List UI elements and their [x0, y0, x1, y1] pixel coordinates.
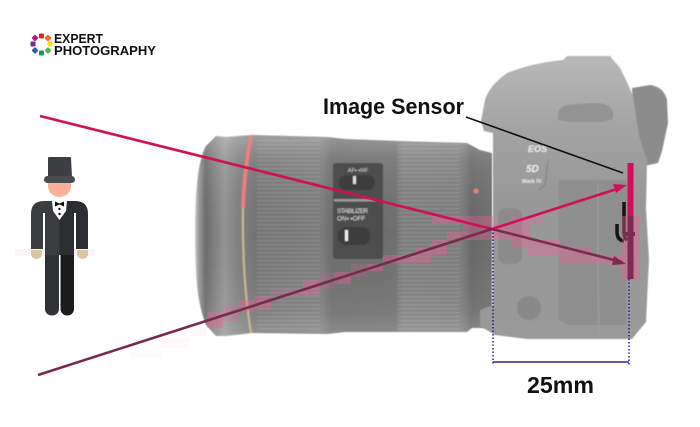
lens red ring [243, 136, 251, 208]
icon: colour ring [30, 34, 52, 56]
switch panel: ON▪ ▪OFF [337, 216, 365, 222]
switch panel: STABILIZER [337, 208, 368, 215]
legs [45, 255, 59, 316]
top dial [558, 103, 613, 122]
pointer line to sensor [466, 117, 623, 173]
camera markings: 5D [526, 164, 539, 175]
shirt and bow tie [52, 201, 67, 220]
ray: top of subject to bottom of sensor [40, 116, 626, 265]
ray: bottom of subject to top of sensor [38, 184, 627, 375]
eyepiece [632, 85, 668, 166]
image sensor label: Image Sensor [323, 94, 464, 119]
switch panel [333, 163, 383, 259]
logo text: PHOTOGRAPHY [54, 43, 156, 58]
image sensor bar [624, 163, 635, 279]
logo [30, 31, 156, 58]
camera markings: EOS [528, 144, 547, 154]
logo text: EXPERT [54, 31, 103, 46]
hat [48, 157, 72, 177]
figure: man in top hat [31, 157, 88, 316]
hands [31, 250, 42, 259]
pink pixel highlights [130, 216, 640, 358]
sensor hook [617, 202, 627, 241]
red dot [474, 188, 478, 194]
zoom ribs [398, 142, 460, 331]
camera markings [522, 144, 547, 185]
switch panel: AF▪ ▪MF [348, 168, 369, 174]
face [48, 183, 71, 197]
camera markings: Mark IV [522, 179, 542, 185]
camera body [480, 56, 668, 339]
focus ribs [257, 138, 320, 332]
lens [195, 135, 492, 336]
faint pink at hands [15, 249, 95, 256]
suit [31, 201, 60, 255]
rear panel [559, 180, 628, 325]
25mm label: 25mm [527, 372, 594, 398]
